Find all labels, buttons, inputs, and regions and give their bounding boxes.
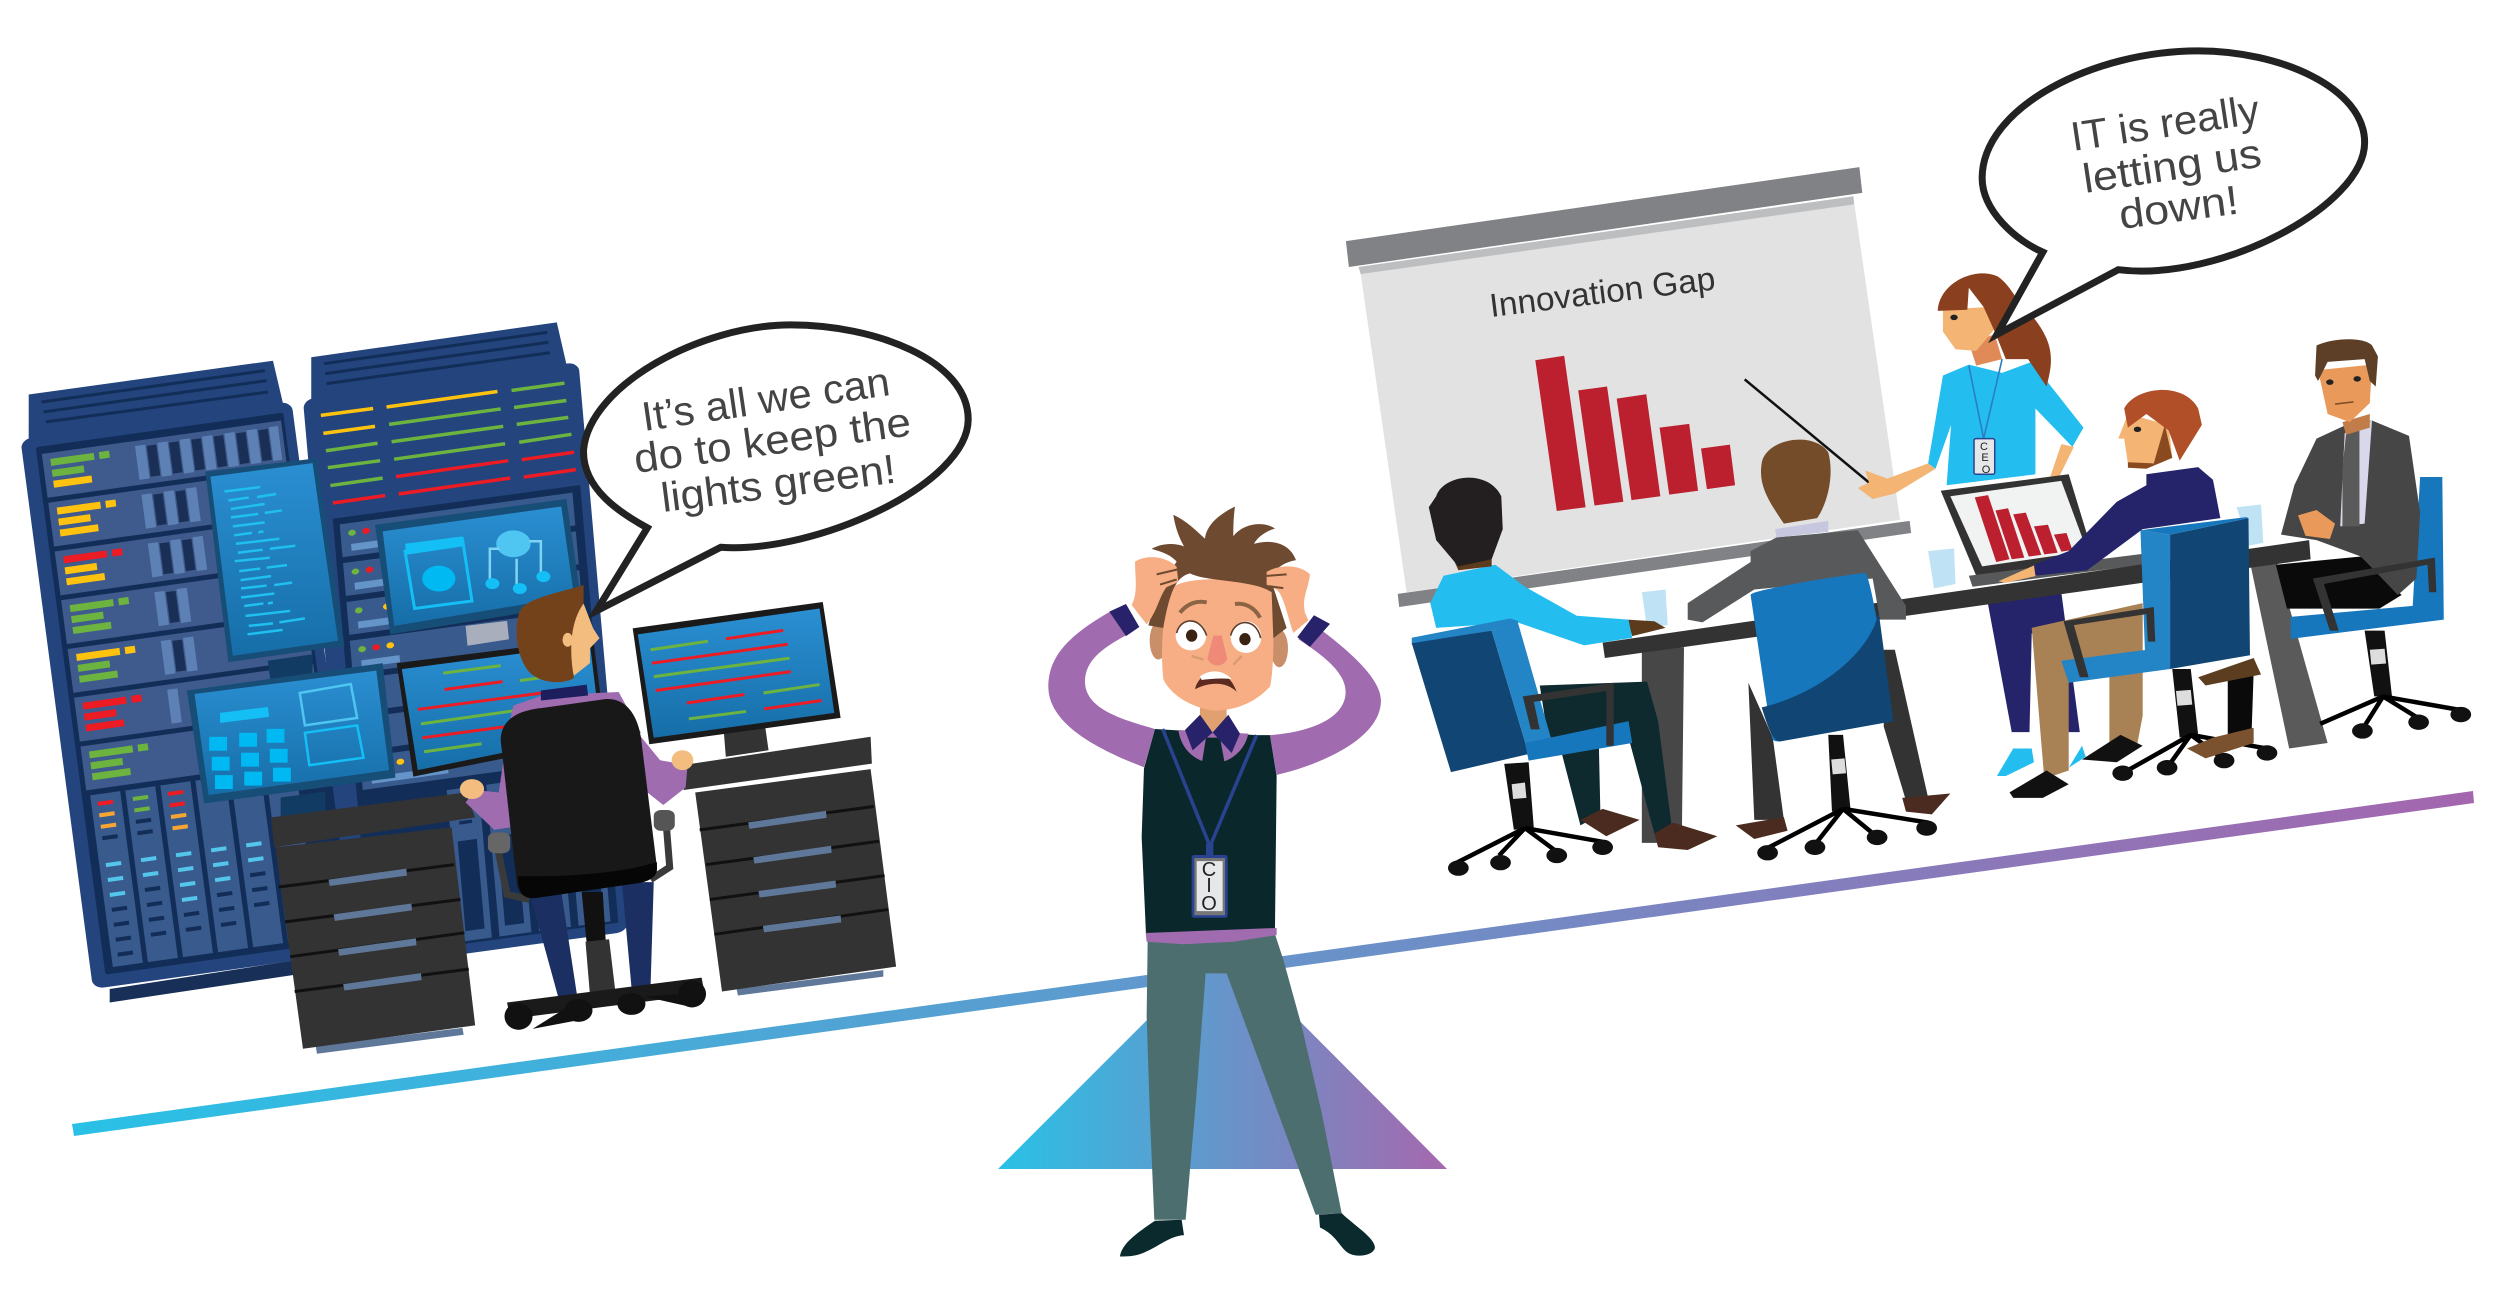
trousers (1147, 934, 1342, 1220)
left rack base shadow (110, 947, 383, 1002)
gradient fulcrum triangle (998, 944, 1447, 1169)
badge text: CIO: C (1202, 859, 1216, 881)
left server rack (20, 401, 364, 989)
speech bubble text: IT is really letting us down!: letting us (2080, 130, 2264, 202)
badge text: CIO: O (1201, 893, 1217, 915)
ears and side hair (1150, 622, 1288, 667)
speech bubble: CEO (1982, 51, 2365, 334)
tall code monitor (205, 458, 344, 686)
speech bubble text: IT is really letting us down!: down! (2116, 177, 2241, 238)
big monitor with dashboards (375, 499, 582, 646)
CEO legs (1987, 592, 2080, 732)
speech bubble text: It's all we can do to keep the lights green!: lights green! (658, 446, 898, 521)
mouth (1195, 671, 1237, 692)
badge text: CEO: O (1982, 464, 1991, 476)
left rack hood (29, 361, 284, 442)
pointer (1745, 379, 1869, 483)
table top (1603, 540, 2311, 658)
nose (1207, 636, 1227, 665)
speech bubble: IT operator (584, 325, 968, 611)
right server rack (303, 362, 628, 969)
CEO presenting (1858, 273, 2083, 499)
eyes (1176, 602, 1261, 665)
lanyard (1163, 729, 1257, 846)
ID badge (1192, 843, 1228, 918)
screen title: Innovation Gap: Innovation Gap (1487, 260, 1717, 324)
middle status monitor (397, 638, 606, 777)
face (1162, 579, 1273, 711)
badge text: CIO: I (1206, 875, 1212, 897)
speech bubble text: It's all we can do to keep the lights green!: It’s all we can (639, 358, 893, 440)
IT operator seen from behind (460, 585, 706, 1030)
boardroom scene (1346, 51, 2471, 876)
status indicator bars on right rack (321, 383, 576, 503)
bar chart on screen (1535, 356, 1735, 511)
collar and neck (1178, 704, 1248, 765)
speech bubble text: It's all we can do to keep the lights green! (631, 358, 914, 521)
spiky hair (1148, 507, 1296, 638)
water glasses (1642, 504, 2263, 628)
speech bubble text: IT is really letting us down!: IT is really (2068, 86, 2263, 160)
boardroom table legs (1642, 559, 2328, 843)
laptop (1941, 474, 2143, 587)
shoes (1120, 1213, 1375, 1257)
badge text: CEO: E (1981, 452, 1989, 464)
sweater vest (1142, 729, 1277, 934)
scene: IT operator at server racks (20, 322, 968, 1054)
right rack hood (311, 322, 568, 404)
attendee with grey jacket in chair (1688, 440, 1950, 860)
speech bubble text: IT is really letting us down! (2068, 86, 2264, 238)
CIO character (1048, 507, 1381, 1257)
badge text: CIO (1201, 859, 1217, 915)
right status monitor (633, 602, 841, 757)
left desk and drawers (271, 793, 475, 1054)
badge text: CEO (1980, 441, 1991, 476)
purple sleeves (1048, 612, 1381, 775)
CEO shoes (1997, 746, 2086, 776)
hands in hair (1132, 557, 1310, 633)
waistband (1146, 928, 1277, 944)
speech bubble text: It's all we can do to keep the lights green!: do to keep the (631, 398, 914, 482)
badge text: CEO: C (1980, 441, 1988, 453)
attendee with blue shirt in chair (1412, 478, 1717, 876)
bearded attendee with laptop (1998, 390, 2277, 798)
cuffs (1109, 604, 1330, 647)
gradient ramp line (72, 791, 2474, 1136)
attendee in dark suit (2187, 339, 2471, 758)
calculator monitor (187, 663, 395, 825)
right desk and drawers (682, 737, 896, 996)
projection screen (1346, 167, 1911, 607)
